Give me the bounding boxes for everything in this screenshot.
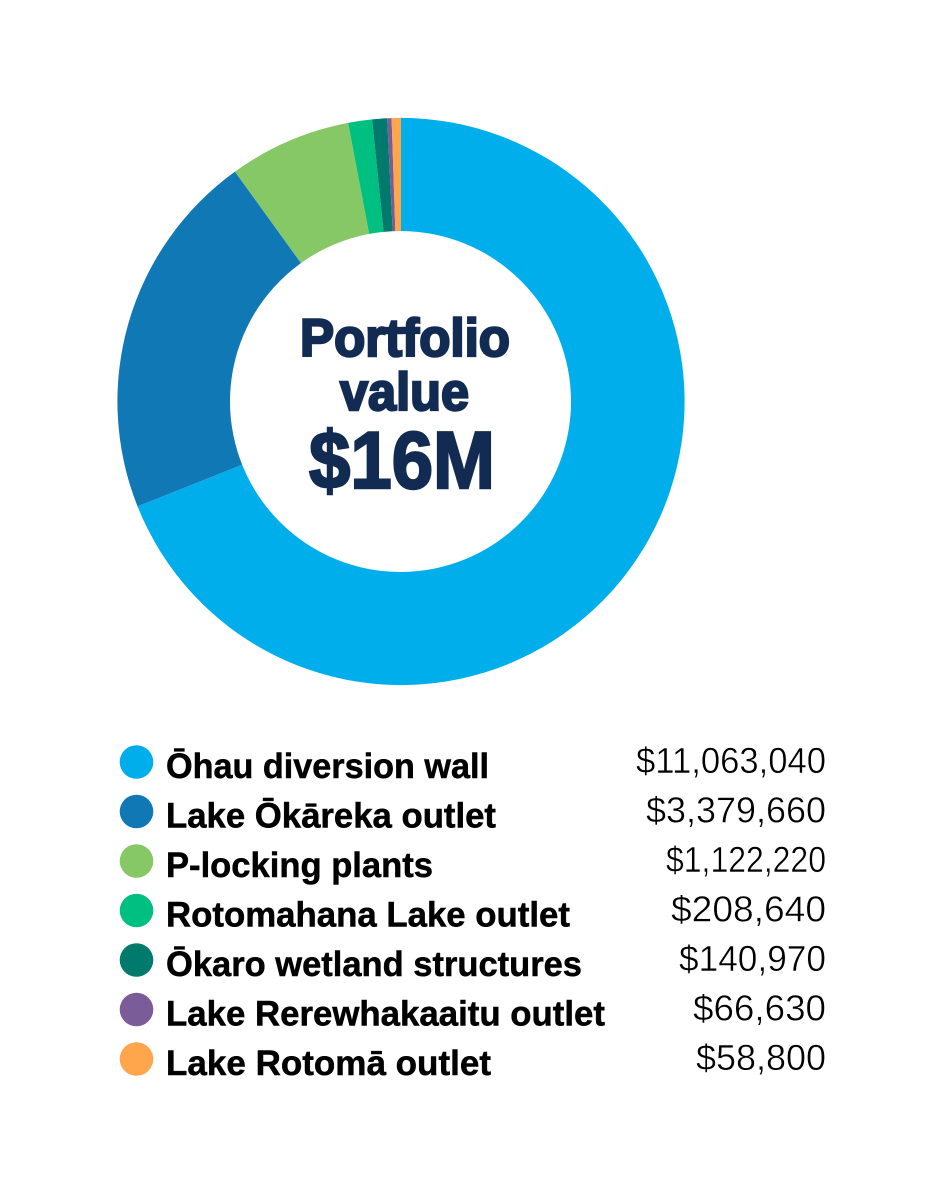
legend row: Rotomahana Lake outlet: Rotomahana Lake outlet (166, 896, 570, 935)
center label: portfolio value (300, 309, 510, 506)
total: $16M: $16M (309, 416, 495, 506)
legend row: Ōhau diversion wall: Ōhau diversion wall (166, 747, 489, 786)
slice: Lake Rotomā outlet (392, 118, 401, 232)
legend row: P-locking plants: $1,122,220 (666, 839, 826, 880)
slice: Lake Rerewhakaaitu outlet (387, 118, 395, 232)
legend row: Lake Rerewhakaaitu outlet: $66,630 (693, 988, 826, 1029)
legend row: Lake Ōkāreka outlet: $3,379,660 (646, 790, 826, 831)
legend row: Rotomahana Lake outlet (120, 889, 826, 935)
legend row: P-locking plants (120, 839, 826, 885)
legend row: Lake Rotomā outlet: $58,800 (696, 1037, 826, 1078)
legend row: Ōkaro wetland structures (120, 938, 826, 984)
donut hole (230, 231, 571, 572)
heading: Portfolio: Portfolio (300, 309, 510, 368)
legend (120, 740, 826, 1083)
slice: Ōkaro wetland structures (372, 118, 393, 233)
legend row: Rotomahana Lake outlet: $208,640 (671, 889, 826, 930)
slice: P-locking plants (235, 123, 369, 264)
legend row: Ōkaro wetland structures: Ōkaro wetland structures (166, 945, 582, 984)
legend row: Lake Rerewhakaaitu outlet (120, 988, 826, 1034)
legend row: Lake Rotomā outlet (120, 1037, 826, 1083)
legend row: Ōhau diversion wall: $11,063,040 (636, 740, 826, 781)
heading: value: value (340, 363, 469, 422)
legend row: Lake Ōkāreka outlet: Lake Ōkāreka outlet (166, 797, 496, 836)
legend row: Lake Rerewhakaaitu outlet: Lake Rerewhakaaitu outlet (166, 995, 605, 1034)
legend row: P-locking plants: P-locking plants (166, 846, 433, 885)
legend row: Ōkaro wetland structures: $140,970 (679, 938, 826, 979)
slice: Lake Ōkāreka outlet (117, 172, 302, 506)
legend row: Lake Ōkāreka outlet (120, 790, 826, 836)
slice: Ōhau diversion wall (138, 118, 685, 685)
donut chart (117, 118, 685, 685)
legend row: Lake Rotomā outlet: Lake Rotomā outlet (166, 1044, 491, 1083)
legend row: Ōhau diversion wall (120, 740, 826, 786)
slice: Rotomahana Lake outlet (348, 119, 384, 235)
